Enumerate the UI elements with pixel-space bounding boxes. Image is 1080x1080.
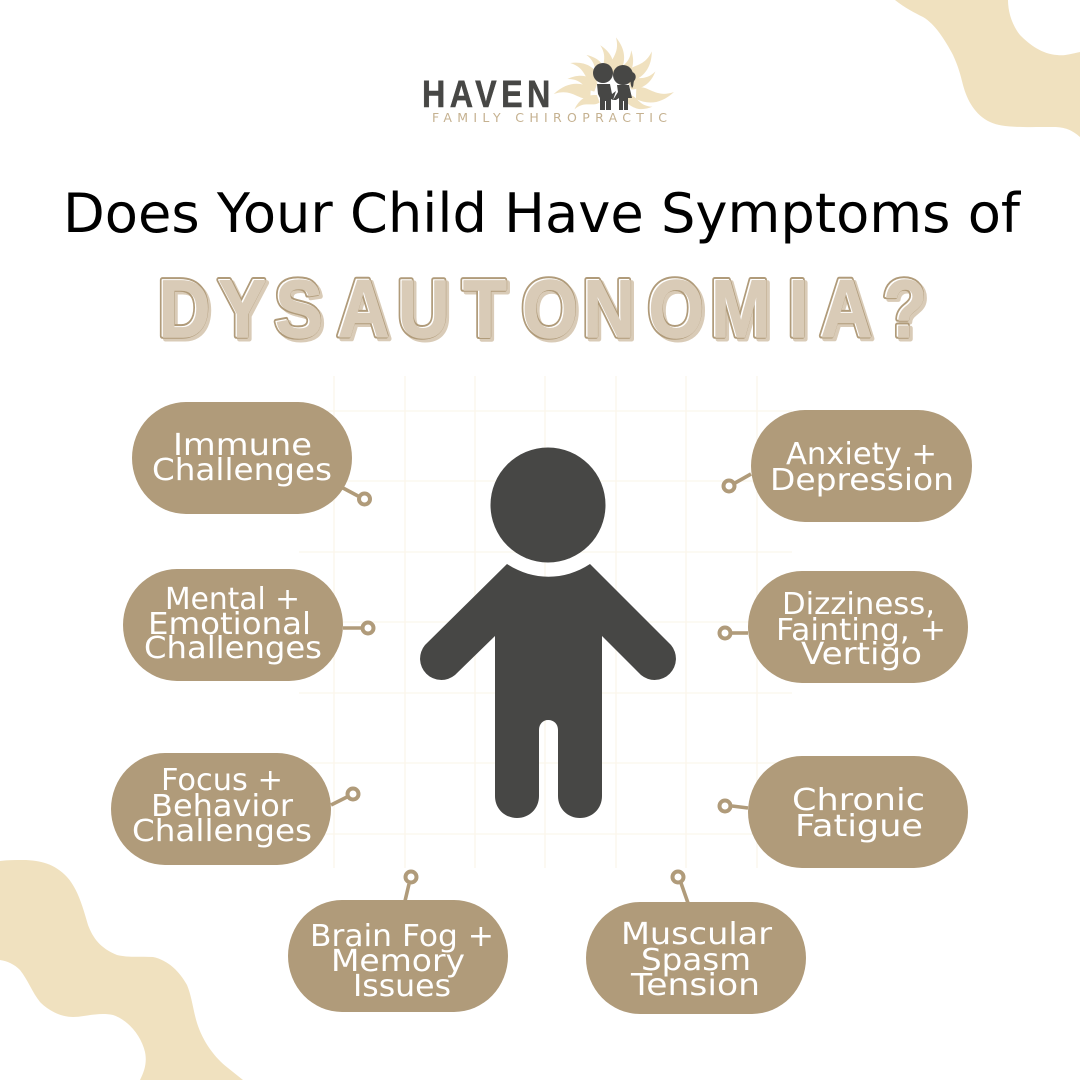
background grid: [299, 376, 792, 868]
symptom: Immune Challenges: [132, 402, 370, 514]
label: Tension: [630, 968, 760, 1003]
label: Brain Fog +: [310, 919, 494, 954]
label: Immune: [173, 428, 312, 463]
label: Vertigo: [801, 637, 922, 672]
label: Fatigue: [795, 809, 923, 844]
pill: [586, 902, 806, 1014]
label: Anxiety +: [786, 437, 937, 472]
figure body: [420, 564, 676, 818]
connector: [672, 872, 688, 903]
label: Chronic: [792, 783, 925, 818]
connector: [343, 622, 374, 634]
figure head: [490, 448, 606, 562]
heading: Dysautonomia?: DYSAUTONOMIA?: [157, 262, 926, 354]
label: Dizziness,: [782, 587, 935, 622]
label: Spasm: [641, 943, 751, 978]
heading: Dysautonomia?: DYSAUTONOMIA?: [157, 262, 926, 354]
label: Fainting, +: [776, 613, 946, 648]
pill: [748, 756, 968, 868]
symptom: Mental + Emotional Challenges: [123, 569, 374, 681]
title: Does Your Child Have Symptoms of: Does Your Child Have Symptoms of: [63, 182, 1022, 245]
pill: [123, 569, 343, 681]
logo icon: two children: [593, 63, 636, 110]
connector: [720, 628, 748, 638]
label: Issues: [353, 969, 451, 1004]
pill: [111, 753, 331, 865]
connector: [724, 474, 751, 492]
label: Memory: [331, 944, 465, 979]
pill: [751, 410, 972, 522]
label: Challenges: [132, 814, 312, 849]
symptom: Focus + Behavior Challenges: [111, 753, 358, 865]
label: Challenges: [152, 453, 332, 488]
heading: Dysautonomia?: DYSAUTONOMIA?: [161, 265, 929, 357]
label: Focus +: [161, 763, 283, 798]
logo icon: sun rays: [554, 37, 674, 114]
logo tagline: Family Chiropractic: FAMILY CHIROPRACTIC: [432, 110, 667, 125]
connector: [720, 800, 748, 812]
symptom: Chronic Fatigue: [720, 756, 968, 868]
label: Behavior: [151, 789, 293, 824]
heading: Dysautonomia?: DYSAUTONOMIA?: [159, 263, 927, 355]
label: Muscular: [621, 917, 773, 952]
logo: Haven Family Chiropractic: [422, 37, 674, 125]
label: Depression: [770, 463, 954, 498]
decorative blob: bottom left: [0, 860, 243, 1080]
figure: child silhouette: [420, 448, 676, 818]
label: Challenges: [144, 631, 322, 666]
decorative blob: top right: [895, 0, 1080, 137]
connector: [343, 488, 370, 504]
symptom: Muscular Spasm Tension: [586, 872, 806, 1014]
pill: [132, 402, 352, 514]
symptom: Anxiety + Depression: [724, 410, 972, 522]
symptom: Dizziness, Fainting, + Vertigo: [720, 571, 968, 683]
connector: [331, 788, 358, 805]
pill: [748, 571, 968, 683]
label: Emotional: [148, 607, 311, 642]
pill: [288, 900, 508, 1012]
label: Mental +: [165, 582, 300, 617]
symptom: Brain Fog + Memory Issues: [288, 872, 508, 1012]
logo wordmark: Haven: HAVEN: [422, 74, 550, 116]
connector: [405, 872, 416, 901]
